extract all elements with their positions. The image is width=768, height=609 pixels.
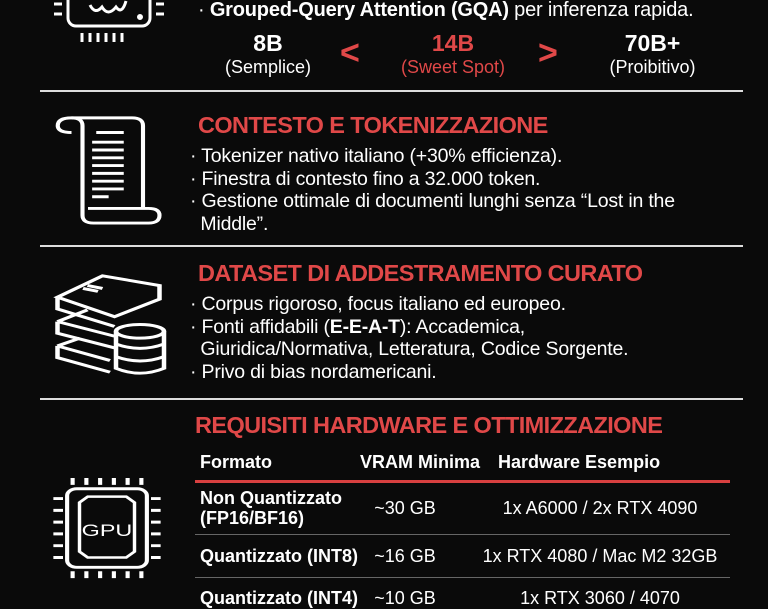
icon: GPU chip: GPU <box>82 522 132 540</box>
bullets <box>190 293 628 382</box>
table: 1x A6000 / 2x RTX 4090 <box>503 498 697 518</box>
14B <box>401 30 505 77</box>
arrow <: < <box>340 34 360 72</box>
table: VRAM Minima <box>360 452 480 472</box>
table: Quantizzato (INT8) <box>200 546 358 566</box>
icon: books and database <box>53 274 166 375</box>
table <box>195 452 730 608</box>
bullets: · Fonti affidabili (E-E-A-T): Accademica, <box>190 316 525 338</box>
panel: dataset <box>190 260 642 382</box>
heading: DATASET DI ADDESTRAMENTO CURATO <box>198 260 642 286</box>
bullets: Giuridica/Normativa, Letteratura, Codice Sorgente. <box>200 338 628 360</box>
bullets: · Finestra di contesto fino a 32.000 token. <box>190 168 540 190</box>
bullets: Middle”. <box>200 212 268 234</box>
bullets: · Tokenizer nativo italiano (+30% efficienza). <box>190 145 562 167</box>
table: (FP16/BF16) <box>200 508 304 528</box>
70B+: (Proibitivo) <box>609 57 696 77</box>
table: ~30 GB <box>374 498 436 518</box>
table: Formato <box>200 452 272 472</box>
icon: brain chip <box>54 0 164 42</box>
14B: 14B <box>432 30 474 56</box>
70B+ <box>609 30 696 77</box>
icon: GPU chip <box>53 478 161 578</box>
70B+: 70B+ <box>625 30 680 56</box>
table: ~16 GB <box>374 546 436 566</box>
icon: scroll <box>56 116 162 224</box>
14B: (Sweet Spot) <box>401 57 505 77</box>
heading: REQUISITI HARDWARE E OTTIMIZZAZIONE <box>195 412 662 438</box>
bullets: · Privo di bias nordamericani. <box>190 360 437 382</box>
table: 1x RTX 4080 / Mac M2 32GB <box>483 546 717 566</box>
table: Quantizzato (INT4) <box>200 588 358 608</box>
panel: hardware <box>195 412 730 608</box>
heading: CONTESTO E TOKENIZZAZIONE <box>198 112 548 138</box>
bullets <box>190 145 675 234</box>
bullets: · Gestione ottimale di documenti lunghi senza “Lost in the <box>190 190 675 212</box>
table: Non Quantizzato <box>200 488 342 508</box>
8B: 8B <box>253 30 283 56</box>
panel: contesto <box>190 112 675 234</box>
bullets: · Corpus rigoroso, focus italiano ed europeo. <box>190 293 566 315</box>
arrow >: > <box>538 34 558 72</box>
table: ~10 GB <box>374 588 436 608</box>
table: Hardware Esempio <box>498 452 660 472</box>
8B: (Semplice) <box>225 57 311 77</box>
size comparison <box>225 30 696 77</box>
8B <box>225 30 311 77</box>
table: 1x RTX 3060 / 4070 <box>520 588 680 608</box>
